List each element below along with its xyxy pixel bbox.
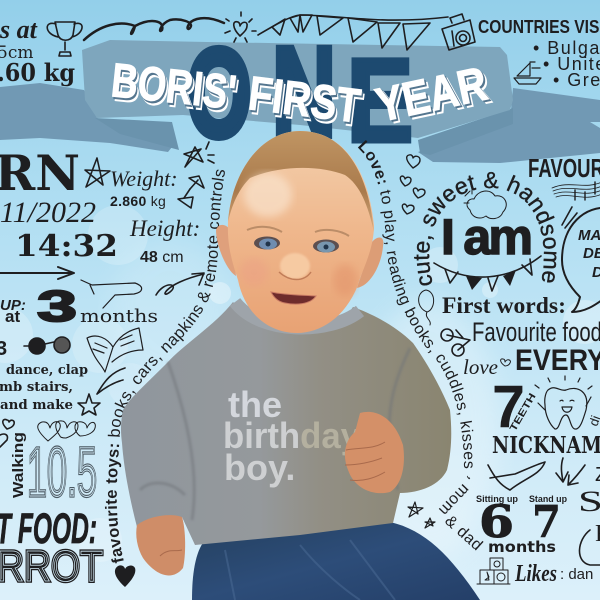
height: 48 cm — [140, 249, 184, 266]
icon: filled heart — [115, 565, 135, 587]
left hand — [136, 515, 185, 575]
carrot word: RROT — [0, 542, 103, 591]
first up block: months — [80, 306, 158, 327]
mouth — [271, 292, 316, 304]
baby photo — [121, 131, 480, 600]
curved toys text: favourite toys: books, cars, napkins & remote controls — [104, 170, 225, 564]
icon: hearts row — [38, 421, 95, 441]
skills text: and make — [0, 398, 73, 413]
icon: star — [85, 158, 110, 187]
forehead highlight — [244, 173, 292, 217]
first up block: UP: — [0, 297, 26, 314]
sweater print: boy. — [224, 447, 295, 488]
cheek shade — [240, 258, 268, 286]
icon: trophy — [47, 22, 82, 56]
eyebrows and eyes — [247, 227, 349, 236]
likes: : dan — [560, 566, 593, 583]
sitting and standing stats: months — [488, 538, 556, 556]
icon: plane — [81, 280, 142, 308]
swoosh arrow — [156, 273, 204, 295]
title: BORIS' — [111, 59, 241, 124]
title: BORIS' — [110, 56, 240, 122]
ONE big word: N — [272, 21, 336, 164]
bunting under — [434, 256, 541, 291]
icons: small stars — [408, 502, 435, 528]
quote marks — [562, 207, 577, 228]
speech bubble — [562, 208, 600, 312]
teeth: TEETH — [508, 392, 539, 434]
text: cut-off height and weight — [0, 15, 75, 87]
nickname — [488, 432, 600, 490]
carrot word: RROT — [0, 542, 103, 591]
first up block: at — [5, 307, 20, 326]
icon: sparkling star — [184, 142, 214, 167]
curved words: cute, sweet & handsome — [414, 172, 556, 286]
icon: outline star — [78, 394, 100, 415]
icon: bike — [441, 329, 470, 356]
title: YEAR — [375, 61, 496, 136]
bokeh circles — [0, 205, 600, 562]
teeth: 7 — [492, 373, 525, 440]
weight: 2.860 kg — [110, 193, 166, 209]
ONE big word: O — [187, 25, 251, 163]
icon: sunglasses — [24, 337, 70, 354]
arrow long — [0, 267, 74, 279]
title: FIRST — [248, 72, 366, 138]
title: FIRST — [246, 67, 363, 134]
first up block — [0, 282, 158, 360]
jeans — [192, 522, 480, 600]
sitting and standing stats: Sitting up — [476, 494, 518, 505]
icon: cloud and sun — [464, 188, 506, 219]
weight: Weight: — [110, 166, 178, 191]
main ribbon — [82, 40, 513, 138]
left ribbon fold — [95, 118, 179, 150]
icon: swoosh marks — [97, 368, 125, 394]
icon: boat — [514, 62, 541, 84]
sitting and standing stats: 7 — [532, 497, 561, 548]
ONE big word: E — [347, 35, 413, 167]
mom text: , mom — [438, 476, 470, 514]
title: FIRST — [247, 69, 365, 136]
dad text: & dad — [446, 516, 484, 550]
arrows down — [556, 458, 585, 485]
I am badge: I am — [441, 209, 533, 265]
height: Height: — [129, 216, 200, 241]
10.5 number: 10.5 — [27, 433, 97, 511]
icon: balloon — [419, 290, 434, 325]
height — [129, 216, 200, 266]
icon: tooth — [535, 376, 592, 429]
icon: toy blocks — [477, 558, 510, 584]
10.5 number — [27, 433, 97, 511]
right ribbon fold — [418, 108, 513, 155]
text: cut-off height and weight: s at — [0, 15, 38, 44]
icon: camera — [442, 14, 475, 50]
right ribbon tail — [418, 88, 600, 163]
sitting and standing stats: Stand up — [529, 494, 567, 505]
I am badge — [414, 172, 556, 292]
icon: heart with rays — [225, 12, 256, 42]
love script: love — [463, 355, 498, 379]
favourites — [528, 153, 600, 312]
born block — [0, 144, 118, 264]
born block: 14:32 — [15, 229, 118, 264]
born block: 11/2022 — [0, 196, 96, 229]
side letters — [578, 464, 600, 565]
skills text: dance, clap — [6, 363, 88, 378]
skills text — [0, 363, 88, 413]
10.5 number: 10.5 — [27, 433, 97, 511]
curved love text: Love: to play, reading books, cuddles, kisses — [358, 140, 474, 468]
title: YEAR — [373, 59, 494, 134]
title: YEAR — [371, 58, 492, 133]
title — [108, 54, 496, 138]
swirl flourish — [84, 18, 224, 40]
left ribbon tail — [0, 83, 172, 152]
banner ribbon — [0, 40, 600, 163]
sweater print: birthday — [223, 415, 360, 456]
first up block: 3 — [37, 282, 77, 331]
first words: First words: — [442, 293, 566, 318]
sitting and standing stats — [476, 494, 567, 556]
walking vertical: Walking — [10, 432, 27, 498]
countries visited — [478, 17, 600, 90]
icon: book — [87, 328, 143, 372]
ONE big word — [187, 21, 413, 167]
curved arrow — [488, 462, 545, 490]
sweatshirt — [121, 302, 451, 545]
hair — [228, 131, 374, 232]
sweater print — [223, 384, 360, 488]
teeth — [492, 373, 600, 440]
nose — [280, 253, 310, 279]
head — [228, 131, 374, 333]
icon: dumbbell — [178, 176, 204, 208]
icon: music staff — [552, 182, 600, 200]
food heading: T FOOD: — [0, 505, 97, 553]
sweater shading — [140, 348, 410, 520]
sitting and standing stats: 6 — [479, 497, 514, 548]
icon: small hearts — [0, 419, 14, 447]
title: BORIS' — [109, 54, 239, 120]
weight — [110, 166, 204, 209]
sweater print: the — [228, 384, 282, 425]
right hand — [345, 412, 404, 493]
icon: bunting top — [258, 15, 448, 50]
hearts column — [400, 155, 425, 214]
likes: Likes — [514, 561, 557, 587]
skills text: mb stairs, — [0, 380, 73, 395]
ears — [216, 225, 236, 276]
likes — [514, 561, 593, 587]
icon: tiny heart — [501, 359, 510, 366]
